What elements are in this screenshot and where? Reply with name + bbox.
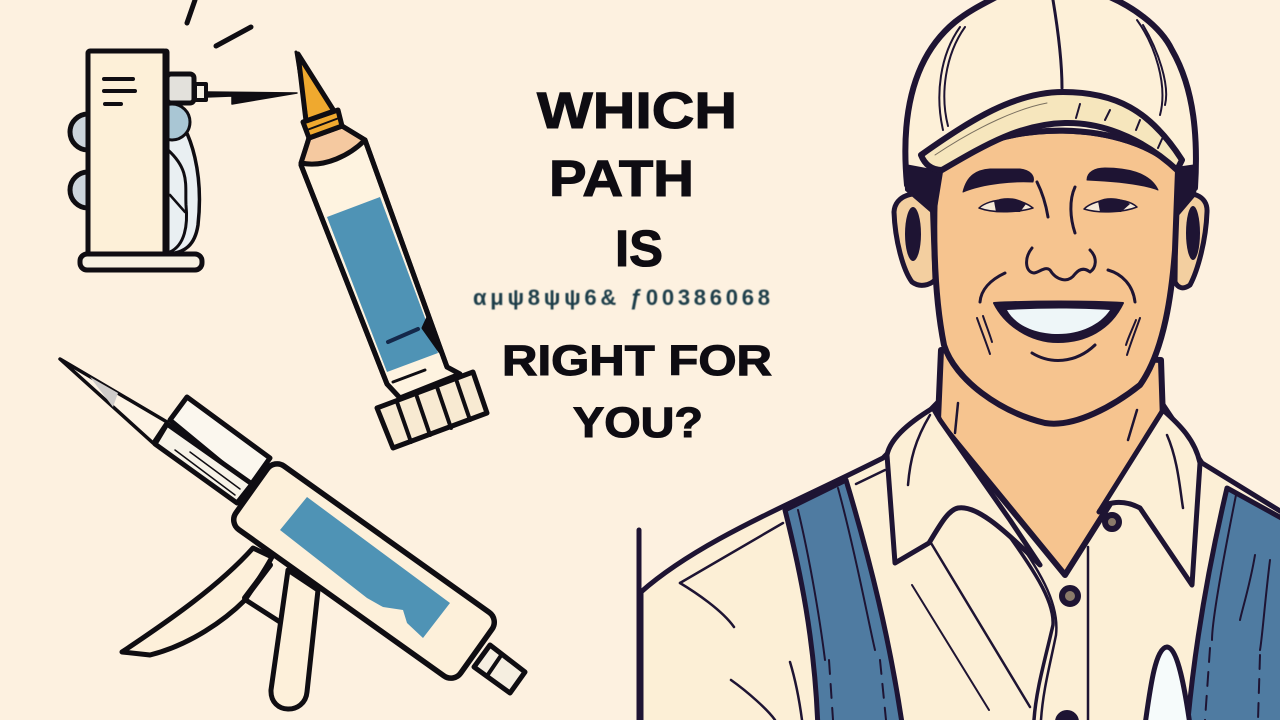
icon: caulking gun xyxy=(60,359,525,709)
title xyxy=(473,82,772,447)
suspender: left xyxy=(785,480,903,720)
icon: spark rays xyxy=(187,0,251,46)
neck xyxy=(938,350,1163,575)
eye: right xyxy=(1084,198,1137,212)
nose and face lines xyxy=(955,182,1140,440)
icon: dispenser tool xyxy=(70,51,297,270)
mouth xyxy=(994,302,1123,342)
shirt placket and folds xyxy=(912,527,1088,720)
shirt xyxy=(641,400,1280,720)
person xyxy=(639,0,1280,720)
icon: pocket pen xyxy=(1145,647,1190,720)
icon: syringe tube xyxy=(296,52,487,448)
face xyxy=(934,131,1178,424)
eye: left xyxy=(979,198,1033,212)
cap brim xyxy=(921,92,1182,170)
collar: right xyxy=(1099,410,1200,585)
eyebrows xyxy=(963,169,1033,192)
cap xyxy=(905,0,1197,215)
title: RIGHT FOR xyxy=(502,337,772,385)
title: YOU? xyxy=(573,399,703,447)
title: WHICH xyxy=(537,82,737,139)
garbled subtitle line: αμψ8ψψ6& ƒ00386068 xyxy=(473,285,770,310)
title: IS xyxy=(615,220,663,277)
vertical edge line xyxy=(636,530,642,720)
suspender: right xyxy=(1187,488,1280,720)
collar: left xyxy=(887,408,1040,565)
ear: left xyxy=(894,194,935,285)
shirt buttons xyxy=(1058,515,1119,720)
ear: right xyxy=(1175,194,1207,288)
title: PATH xyxy=(549,150,694,207)
